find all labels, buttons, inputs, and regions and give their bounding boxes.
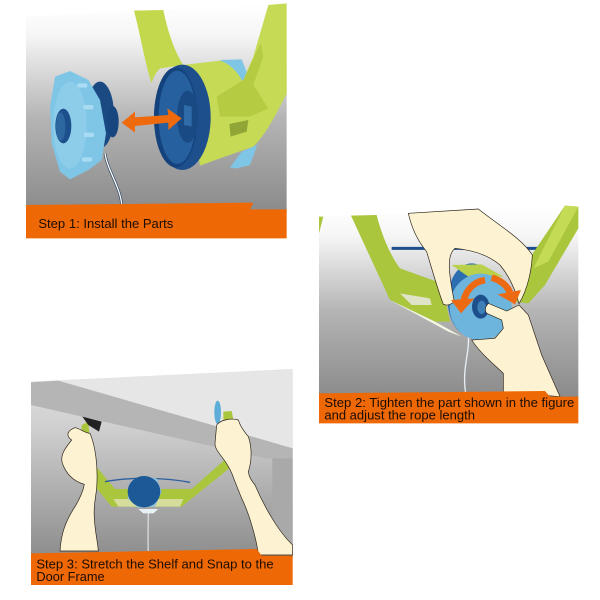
caption band: step 2 bbox=[319, 391, 578, 423]
caption band: step 3: Door Frame bbox=[36, 569, 105, 584]
caption band: step 1 bbox=[26, 203, 287, 238]
illustration: left hand and arm bbox=[60, 428, 98, 551]
caption band: step 3: Step 3: Stretch the Shelf and Snap to the bbox=[36, 556, 274, 571]
arrows: orange rotation bbox=[451, 278, 521, 313]
illustration: light blue spool with rope bbox=[50, 71, 122, 204]
arrow: double-headed orange bbox=[122, 108, 182, 133]
illustration: green shelf with blue hub bbox=[78, 401, 233, 551]
panel: step 2 tighten the part bbox=[319, 206, 578, 423]
illustration: lower hand bbox=[472, 303, 560, 397]
illustration: green arms and rope bbox=[319, 206, 578, 337]
caption band: step 2: Step 2: Tighten the part shown in the figure bbox=[324, 395, 574, 410]
illustration: right hand and arm bbox=[215, 419, 293, 555]
caption band: step 3 bbox=[31, 549, 293, 585]
illustration: blue spool bbox=[448, 263, 512, 340]
illustration: upper hand bbox=[408, 209, 532, 305]
panel: step 3 stretch the shelf bbox=[31, 369, 293, 585]
caption band: step 2: and adjust the rope length bbox=[324, 408, 475, 423]
caption band: step 1: Step 1: Install the Parts bbox=[38, 216, 174, 231]
panel: step 1 install the parts bbox=[26, 3, 287, 238]
illustration: green shelf arm with navy drum bbox=[134, 3, 287, 170]
illustration: door frame ceiling bbox=[31, 370, 293, 550]
illustration: rope bbox=[465, 337, 469, 393]
